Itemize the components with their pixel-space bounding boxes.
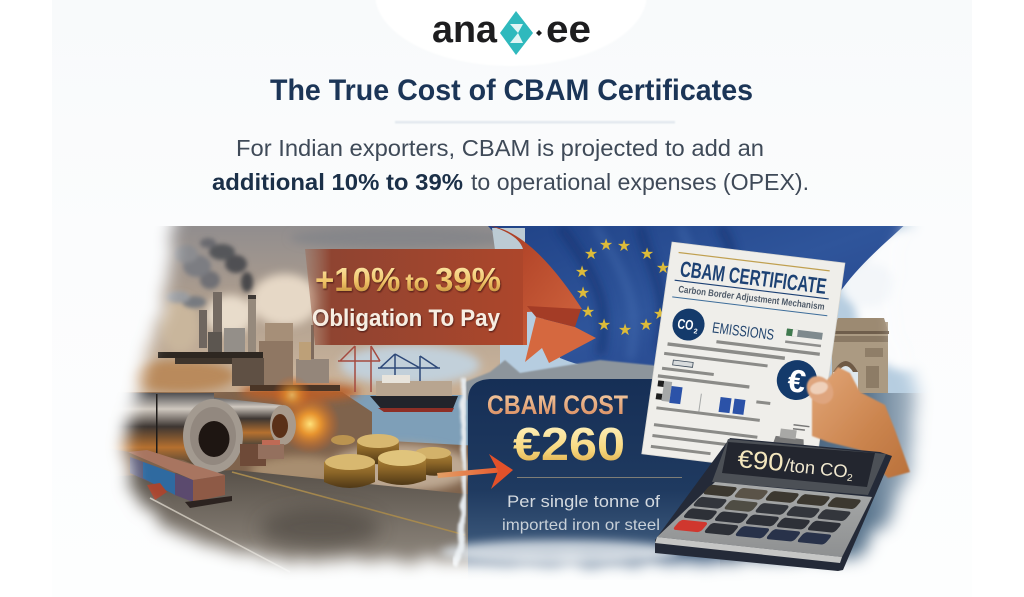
scene: road — [124, 470, 468, 574]
panel: CBAM cost card: imported iron or steel — [502, 517, 660, 534]
icon: euro badge — [774, 358, 820, 402]
icon: EU stars: ★ — [575, 264, 589, 281]
icon: stacked crates — [240, 440, 284, 466]
ribbon curl — [490, 226, 582, 345]
scene: right sky and clouds — [500, 226, 926, 393]
title: The True Cost of CBAM Certificates — [270, 74, 753, 107]
banner percentage: +10%to39% — [315, 261, 501, 298]
icon: steel coil large — [116, 393, 243, 472]
icon: CO2 badge — [670, 307, 707, 342]
icon: factory with chimneys — [158, 292, 340, 391]
certificate document — [642, 242, 845, 475]
icon: EU stars — [575, 237, 670, 339]
cost card value: €260 — [513, 418, 625, 470]
calculator keys — [672, 485, 862, 545]
masked scene — [112, 226, 926, 577]
panel: sea backdrop — [720, 393, 926, 575]
subtitle text: to operational expenses (OPEX). — [471, 169, 809, 195]
icon: triumphal arch — [830, 318, 889, 396]
scene: water — [350, 395, 468, 446]
arrow: banner head — [525, 317, 596, 363]
header logo: anacee: ee — [546, 9, 591, 51]
subtitle text — [212, 121, 809, 195]
certificate subtitle: Carbon Border Adjustment Mechanism — [678, 284, 825, 313]
icon: container train — [128, 450, 232, 508]
torn white edge between scenes — [454, 378, 465, 566]
scene: sky — [127, 226, 500, 398]
panel: stone edge above cost card — [465, 359, 654, 400]
scene: dust and embers — [125, 360, 472, 492]
icon: EU stars: ★ — [576, 285, 590, 302]
calculator screen: 2 — [846, 473, 854, 484]
certificate title: CBAM CERTIFICATE — [679, 256, 828, 299]
icon: EU stars: ★ — [618, 322, 632, 339]
subtitle text: For Indian exporters, CBAM is projected to add an — [236, 135, 764, 161]
icon: hand holding certificate — [801, 367, 910, 478]
header logo: anacee: ana — [432, 9, 498, 51]
certificate emissions label: EMISSIONS — [711, 320, 775, 344]
icon: euro badge: € — [785, 362, 808, 400]
certificate data blocks — [655, 380, 747, 417]
icon: cargo ship — [370, 375, 458, 412]
icon: CO2 badge: CO — [676, 315, 695, 333]
icon: steel coil small — [214, 398, 296, 445]
cost card description: Per single tonne of — [507, 492, 660, 511]
banner ribbon — [305, 249, 523, 345]
icon: EU stars: ★ — [640, 246, 654, 263]
scene: ground — [112, 392, 468, 494]
icon: EU stars: ★ — [597, 317, 611, 334]
panel: flag backdrop — [488, 226, 904, 366]
icon: stamp — [767, 421, 810, 464]
calculator screen — [722, 442, 875, 487]
calculator screen: /ton CO — [784, 455, 847, 481]
icon: smoke plumes — [166, 238, 253, 308]
icon: embers and fire — [274, 377, 338, 452]
icon: EU stars: ★ — [581, 304, 595, 321]
icon: EU stars: ★ — [653, 306, 667, 323]
calculator screen: €90 — [736, 445, 785, 477]
icon: EU stars: ★ — [639, 317, 653, 334]
icon: EU stars: ★ — [617, 238, 631, 255]
icon: EU stars: ★ — [599, 237, 613, 254]
calculator — [655, 438, 892, 571]
banner caption: Obligation To Pay — [312, 305, 500, 332]
icon: CO2 badge: 2 — [693, 328, 698, 336]
icon: EU stars: ★ — [656, 260, 670, 277]
icon: port cranes — [338, 346, 440, 392]
cost card heading: CBAM COST — [487, 390, 628, 420]
panel: CBAM cost card — [440, 379, 720, 580]
banner: obligation to pay — [305, 226, 596, 363]
arrow: coins to cost — [437, 454, 513, 489]
icon: EU stars: ★ — [584, 246, 598, 263]
illustration panel — [112, 226, 926, 577]
sky patch behind ribbon curl — [492, 228, 525, 250]
certificate text lines — [648, 334, 820, 467]
header logo: anacee — [375, 0, 647, 66]
subtitle text: additional 10% to 39% — [212, 169, 463, 195]
icon: gold coin stacks — [324, 434, 452, 488]
scene: clouds — [160, 227, 510, 385]
